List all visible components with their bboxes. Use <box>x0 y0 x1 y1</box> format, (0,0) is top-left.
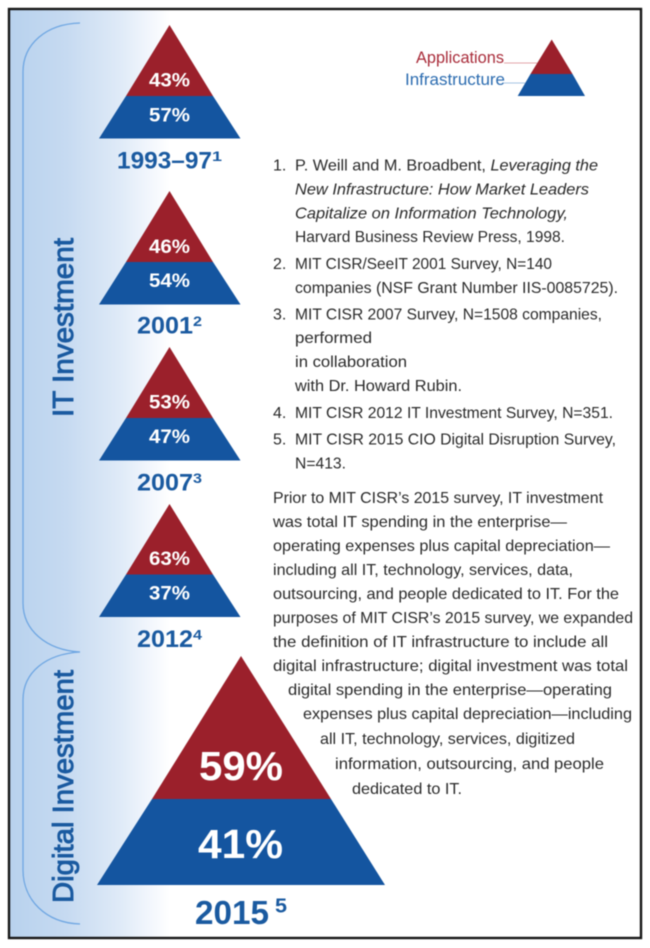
legend: Applications <box>416 49 504 67</box>
text block: numbered references: 5. <box>273 432 286 448</box>
pyramid: 1993-97: 1 <box>212 148 222 164</box>
text block: definition paragraph: purposes of MIT CISR’s 2015 survey, we expanded <box>273 610 633 627</box>
text block: definition paragraph: expenses plus capital depreciation—including <box>303 706 632 723</box>
pyramid: 1993-97 <box>99 25 240 174</box>
pyramid: 2012: 4 <box>193 626 202 642</box>
text block: numbered references: New Infrastructure: How Market Leaders <box>295 182 589 198</box>
pyramid: 1993-97: 43% <box>149 70 190 92</box>
text block: numbered references: performed <box>295 330 372 347</box>
pyramid: 2007: 47% <box>149 426 190 448</box>
text block: definition paragraph <box>272 490 633 798</box>
pyramid: 2012: 37% <box>149 582 190 604</box>
pyramid: 2001 <box>99 191 240 340</box>
text block: numbered references: MIT CISR 2015 CIO Digital Disruption Survey, <box>295 432 616 448</box>
text block: numbered references: Harvard Business Review Press, 1998. <box>295 229 565 246</box>
text block: numbered references: 1. <box>273 158 286 174</box>
text block: numbered references: P. Weill and M. Broadbent, Leveraging the <box>295 158 598 174</box>
pyramid: 2015: 59% <box>199 743 283 789</box>
text block: definition paragraph: information, outsourcing, and people <box>335 756 604 773</box>
pyramid: 2015 <box>97 656 385 931</box>
heading: Digital Investment: Digital Investment <box>48 670 80 903</box>
pyramid: 2015: 41% <box>198 821 283 867</box>
text block: numbered references: N=413. <box>295 456 346 472</box>
text block: numbered references: MIT CISR 2007 Survey, N=1508 companies, <box>295 306 602 324</box>
text block: numbered references: MIT CISR 2012 IT Investment Survey, N=351. <box>295 405 613 422</box>
text block: definition paragraph: all IT, technology, services, digitized <box>320 731 575 748</box>
pyramid: 2001: 2 <box>193 313 202 329</box>
text block: definition paragraph: digital infrastructure; digital investment was total <box>273 658 628 675</box>
text block: numbered references <box>273 158 618 472</box>
bracket: IT Investment <box>23 23 80 652</box>
text block: numbered references: 4. <box>273 405 286 422</box>
pyramid: 2015: 2015 <box>195 894 269 931</box>
pyramid: 1993-97: 1993–97 <box>117 148 212 174</box>
text block: definition paragraph: outsourcing, and people dedicated to IT. For the <box>273 586 619 603</box>
text block: definition paragraph: dedicated to IT. <box>352 781 462 798</box>
pyramid: 2007: 53% <box>149 392 190 414</box>
pyramid: 2015: 5 <box>275 896 287 918</box>
pyramid: 2001: 46% <box>149 236 190 258</box>
pyramid: 2007: 3 <box>193 470 202 486</box>
text block: numbered references: companies (NSF Grant Number IIS-0085725). <box>295 280 618 297</box>
text block: definition paragraph: was total IT spending in the enterprise— <box>272 514 567 531</box>
pyramid: 2012: 2012 <box>137 626 193 653</box>
text block: numbered references: Capitalize on Information Technology, <box>295 206 568 222</box>
heading: IT Investment: IT Investment <box>48 238 80 417</box>
text block: definition paragraph: digital spending in the enterprise—operating <box>288 682 612 699</box>
text block: numbered references: 3. <box>273 306 286 324</box>
legend <box>405 40 585 96</box>
pyramid: 2001: 54% <box>149 270 190 292</box>
text block: numbered references: with Dr. Howard Rubin. <box>294 378 462 395</box>
text block: numbered references: in collaboration <box>295 354 407 371</box>
pyramid: 2012: 63% <box>149 548 190 570</box>
text block: definition paragraph: operating expenses plus capital depreciation— <box>273 538 610 555</box>
text block: numbered references: MIT CISR/SeeIT 2001 Survey, N=140 <box>295 256 552 273</box>
bracket: Digital Investment <box>23 652 80 924</box>
text block: definition paragraph: including all IT, technology, services, data, <box>273 562 573 579</box>
legend: Infrastructure <box>405 71 505 89</box>
text block: numbered references: 2. <box>273 256 286 273</box>
pyramid: 2007 <box>99 347 240 496</box>
pyramid: 1993-97: 57% <box>149 104 190 126</box>
pyramid: 2001: 2001 <box>137 312 193 340</box>
text block: definition paragraph: the definition of IT infrastructure to include all <box>273 634 608 651</box>
pyramid: 2007: 2007 <box>137 470 193 496</box>
text block: definition paragraph: Prior to MIT CISR’s 2015 survey, IT investment <box>273 490 604 507</box>
pyramid: 2012 <box>99 504 240 653</box>
